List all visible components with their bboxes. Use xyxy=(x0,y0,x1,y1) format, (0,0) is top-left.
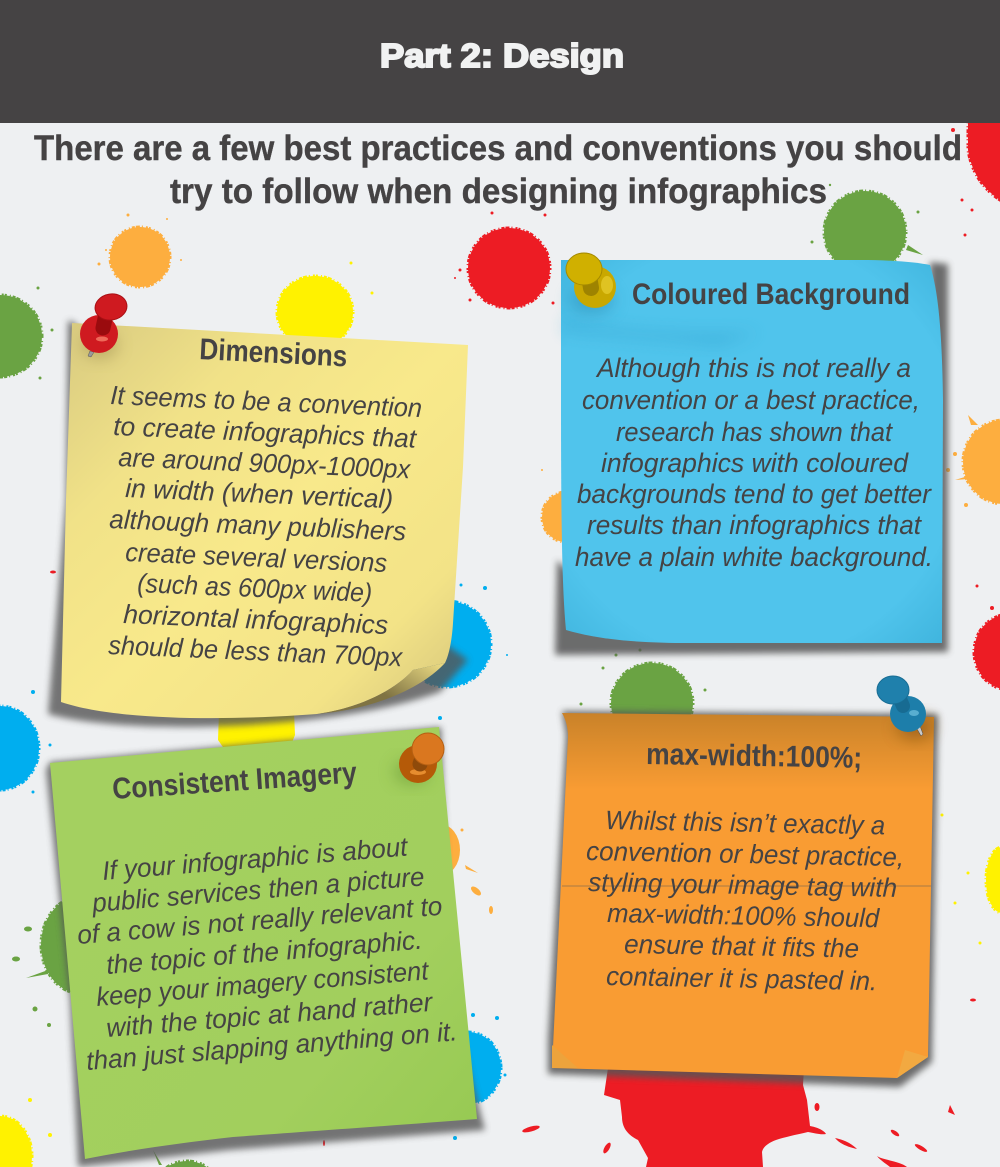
body text: convention or a best practice, xyxy=(582,385,920,415)
splat: green left xyxy=(0,286,54,380)
body text: ensure that it fits the xyxy=(624,929,859,964)
corner fold right xyxy=(897,1050,928,1078)
splat: red bottom xyxy=(50,570,976,1167)
body text: Although this is not really a xyxy=(595,353,911,383)
body text xyxy=(575,353,933,572)
body text: in width (when vertical) xyxy=(125,473,394,514)
body text: (such as 600px wide) xyxy=(137,568,373,608)
intro heading: There are a few best practices and conventions you should xyxy=(34,129,962,168)
note: Coloured Background xyxy=(555,260,948,655)
icon: red push pin xyxy=(80,291,129,359)
body text: create several versions xyxy=(125,537,388,578)
body text: keep your imagery consistent xyxy=(95,955,431,1012)
body text: max-width:100% should xyxy=(607,898,881,933)
body text xyxy=(586,805,904,996)
body text: research has shown that xyxy=(616,417,894,447)
body text xyxy=(108,380,423,672)
fold shading xyxy=(565,320,760,345)
icon: yellow push pin xyxy=(566,253,616,314)
splat: orange behind green note xyxy=(420,824,493,914)
splat: yellow right xyxy=(940,814,1000,944)
splat: orange top left xyxy=(98,214,182,287)
body text: public services then a picture xyxy=(90,861,425,918)
body text: It seems to be a convention xyxy=(110,380,423,423)
intro heading: try to follow when designing infographics xyxy=(170,172,827,211)
body text: have a plain white background. xyxy=(575,542,933,572)
body text: are around 900px-1000px xyxy=(118,442,412,484)
page curl xyxy=(317,663,445,714)
body text: the topic of the infographic. xyxy=(105,925,423,980)
body text: should be less than 700px xyxy=(108,630,404,672)
heading: Coloured Background xyxy=(632,278,910,311)
icon: blue push pin xyxy=(877,676,933,739)
splat: red top centre xyxy=(454,212,554,308)
header title: Part 2: Design xyxy=(380,37,624,74)
splat: orange behind blue note xyxy=(541,469,590,542)
body text: backgrounds tend to get better xyxy=(577,479,932,509)
splat: green behind green note xyxy=(12,896,123,1027)
body text: container it is pasted in. xyxy=(606,961,877,996)
body text: than just slapping anything on it. xyxy=(85,1016,458,1076)
body text: styling your image tag with xyxy=(588,867,897,903)
body text: If your infographic is about xyxy=(101,831,410,886)
body text: with the topic at hand rather xyxy=(105,987,435,1043)
splat: green under blue note xyxy=(580,648,706,743)
splat: green top right xyxy=(810,184,923,273)
splat: blue centre xyxy=(403,584,508,720)
crease line xyxy=(562,885,931,887)
body text: Whilst this isn’t exactly a xyxy=(605,805,885,840)
note: Consistent Imagery xyxy=(46,727,485,1167)
body text: results than infographics that xyxy=(587,510,923,540)
header bar xyxy=(0,0,1000,123)
splat: red top right xyxy=(951,123,1000,236)
splat: yellow under note xyxy=(218,712,295,750)
note: Dimensions xyxy=(48,321,468,727)
body text: although many publishers xyxy=(109,504,407,546)
body text xyxy=(76,831,458,1076)
splat: orange right xyxy=(946,415,1000,507)
heading: Consistent Imagery xyxy=(111,756,358,806)
intro heading xyxy=(34,129,962,211)
corner fold left xyxy=(552,1045,578,1068)
icon: orange push pin xyxy=(394,733,444,784)
splat: green bottom xyxy=(153,1150,214,1167)
splat: blue left xyxy=(0,690,52,794)
splat: yellow top xyxy=(277,262,374,348)
splat: red right xyxy=(974,584,1000,690)
note: max-width:100% xyxy=(548,711,938,1087)
heading: max-width:100%; xyxy=(646,738,862,775)
splat: yellow bottom left xyxy=(0,1098,52,1167)
body text: horizontal infographics xyxy=(123,599,389,640)
heading: Dimensions xyxy=(199,333,348,373)
body text: infographics with coloured xyxy=(601,448,909,478)
splat: blue behind green note xyxy=(435,1013,506,1140)
body text: to create infographics that xyxy=(113,411,418,454)
body text: of a cow is not really relevant to xyxy=(76,891,443,950)
body text: convention or best practice, xyxy=(586,836,904,872)
